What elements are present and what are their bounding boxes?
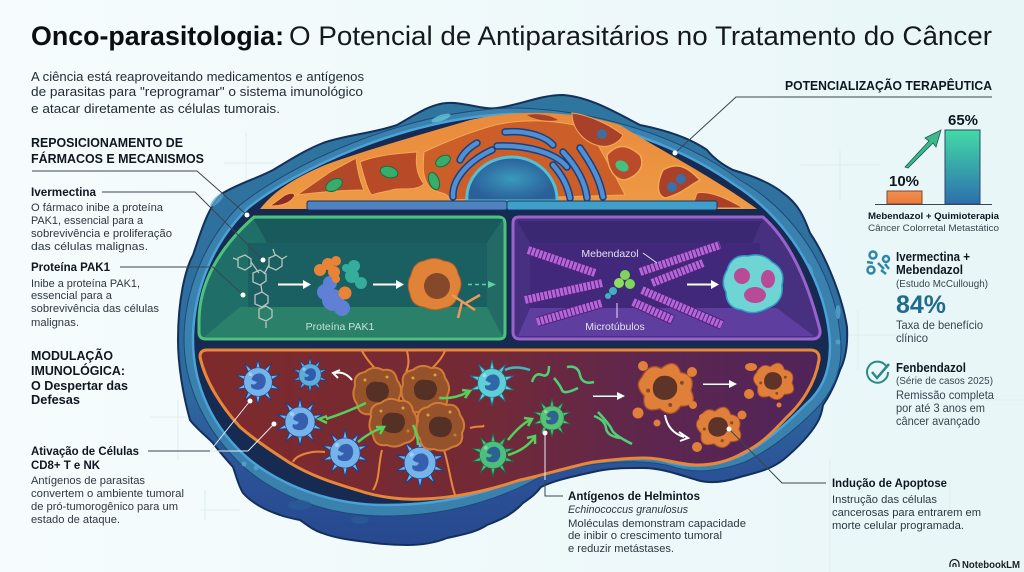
heading: modulação imunológica: Defesas [31, 393, 80, 407]
nucleus [467, 157, 557, 201]
membrane details [209, 112, 841, 524]
callout line: cytoplasm [672, 97, 992, 156]
text block: antígenos de helmintos: Antígenos de Helmintos [568, 489, 700, 503]
labels: Mebendazol [581, 248, 639, 260]
text block: antígenos de helmintos: Moléculas demonstram capacidade [568, 518, 746, 530]
text block: ivermectina: Ivermectina [31, 185, 96, 199]
heading: reposicionamento [31, 136, 250, 218]
labels: Microtúbulos [585, 321, 645, 333]
title: O Potencial de Antiparasitários no Tratamento do Câncer [289, 21, 992, 51]
text block: proteína PAK1: malignas. [31, 317, 79, 329]
heading: modulação imunológica [31, 348, 128, 407]
microtubules [525, 245, 722, 325]
text block: indução de apoptose [726, 426, 981, 532]
cytoplasm orange [260, 113, 757, 209]
panel: ivermectina + mebendazol stat: Taxa de benefício [896, 318, 983, 332]
panel: fenbendazol stat: Remissão completa [896, 388, 994, 402]
icon: check [867, 362, 889, 383]
icon: molecules [867, 252, 889, 274]
text block: antígenos de helmintos: Echinococcus granulosus [568, 504, 688, 516]
golgi [453, 132, 603, 198]
parasites [532, 366, 632, 444]
text block: ivermectina: sobrevivência e proliferação [31, 228, 172, 240]
panel: fenbendazol stat: por até 3 anos em [896, 401, 985, 415]
text block: ativação de células: Antígenos de parasitas [31, 475, 145, 487]
bar chart: Câncer Colorretal Metastático [868, 223, 999, 234]
panel: ivermectina + mebendazol stat: clínico [896, 331, 928, 345]
text block: ativação de células [31, 398, 276, 526]
text block: ivermectina [31, 185, 266, 262]
green arrows [319, 368, 535, 455]
heading: modulação imunológica: MODULAÇÃO [31, 348, 113, 363]
veins [293, 351, 483, 495]
text block: indução de apoptose: cancerosas para entrarem em [832, 507, 981, 519]
text block: proteína PAK1 [31, 260, 246, 329]
text block: ativação de células: CD8+ T e NK [31, 458, 100, 472]
white arrow [333, 370, 352, 380]
intro text: A ciência está reaproveitando medicamentos e antígenos [31, 69, 365, 84]
text block: ivermectina: PAK1, essencial para a [31, 215, 144, 227]
cell interior [193, 114, 830, 505]
white arrows [593, 380, 737, 400]
organelles [270, 113, 743, 208]
text block: ivermectina: O fármaco inibe a proteína [31, 202, 164, 214]
heading: modulação imunológica: O Despertar das [31, 379, 128, 393]
molecule icon [233, 249, 287, 328]
cell membrane teal band [184, 108, 841, 516]
title: Onco-parasitologia: [31, 21, 284, 51]
heading: reposicionamento: FÁRMACOS E MECANISMOS [31, 151, 204, 166]
panel: ivermectina + mebendazol stat [867, 250, 988, 345]
text block: proteína PAK1: Proteína PAK1 [31, 260, 110, 274]
panel: ivermectina + mebendazol stat: 84% [896, 291, 946, 319]
text block: antígenos de helmintos: de inibir o crescimento tumoral [568, 530, 722, 542]
panel: ivermectina + mebendazol stat: Mebendazol [896, 263, 963, 277]
panel: fenbendazol stat [867, 361, 994, 428]
intro text [31, 69, 365, 116]
labels [581, 248, 657, 333]
panel: fenbendazol stat: (Série de casos 2025) [896, 375, 993, 387]
heading: modulação imunológica: IMUNOLÓGICA: [31, 363, 125, 378]
heading: potencialização terapêutica: POTENCIALIZAÇÃO TERAPÊUTICA [785, 78, 992, 93]
immune cells [236, 357, 445, 488]
arrow: growth [905, 130, 941, 168]
text block: ativação de células: de pró-tumorogênico para um [31, 501, 178, 513]
panel: tumor microenvironment [200, 350, 819, 499]
text block: antígenos de helmintos: e reduzir metástases. [568, 543, 674, 555]
apoptotic cells [632, 361, 794, 452]
membrane bar [307, 201, 717, 210]
panel: green compartment [199, 217, 505, 339]
text block: proteína PAK1: sobrevivência das células [31, 303, 159, 315]
arrow [687, 280, 719, 289]
text block: indução de apoptose: morte celular programada. [832, 520, 964, 532]
intro text: de parasitas para "reprogramar" o sistema imunológico [31, 84, 363, 99]
arrow [373, 280, 404, 289]
bar chart [868, 112, 1000, 234]
text block: proteína PAK1: Inibe a proteína PAK1, [31, 278, 140, 290]
panel: purple compartment [513, 217, 820, 339]
protein [314, 256, 367, 316]
teal and green cells [470, 360, 571, 477]
text block: ativação de células: convertem o ambiente tumoral [31, 488, 184, 500]
panel: ivermectina + mebendazol stat: (Estudo McCullough) [896, 278, 988, 290]
text block: indução de apoptose: Instrução das células [832, 494, 937, 506]
panel: fenbendazol stat: câncer avançado [896, 414, 980, 428]
dashed arrow [468, 284, 488, 286]
heading: reposicionamento: REPOSICIONAMENTO DE [31, 136, 183, 150]
text block: proteína PAK1: essencial para a [31, 290, 113, 302]
drug particles [605, 270, 635, 299]
dying cell [723, 255, 783, 313]
panel: ivermectina + mebendazol stat: Ivermectina + [896, 250, 970, 264]
text block: ativação de células: estado de ataque. [31, 514, 120, 526]
bar chart: Mebendazol + Quimioterapia [868, 211, 1000, 222]
text block: indução de apoptose: Indução de Apoptose [832, 476, 947, 490]
cell illustration [178, 95, 847, 545]
cancer cell [408, 258, 480, 318]
bar chart: 65% [948, 112, 978, 129]
text block: antígenos de helmintos [542, 430, 746, 555]
logo: NotebookLM: NotebookLM [962, 560, 1020, 571]
tumor cells [353, 366, 464, 451]
arrow [278, 280, 311, 289]
panel: fenbendazol stat: Fenbendazol [896, 361, 966, 375]
bar chart: 10% [889, 173, 919, 190]
label: Proteína PAK1 [306, 321, 374, 333]
cell membrane outer [178, 95, 847, 545]
text block: ativação de células: Ativação de Células [31, 444, 139, 458]
text block: ivermectina: das células malignas. [31, 241, 148, 253]
intro text: e atacar diretamente as células tumorais. [31, 101, 280, 116]
